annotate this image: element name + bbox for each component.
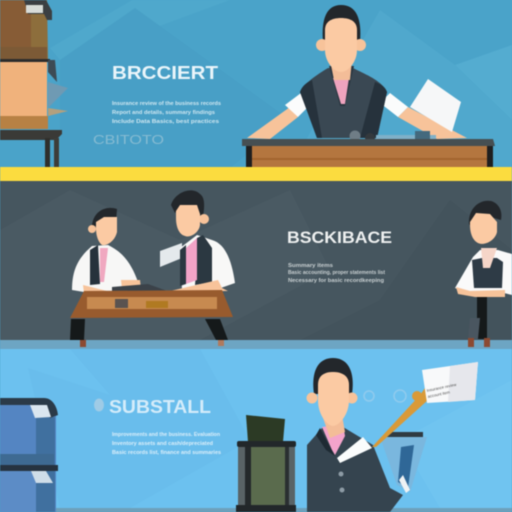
text block: middle	[288, 263, 385, 284]
text block: bottom	[112, 432, 221, 456]
text block: bottom: Improvements and the business. Evaluation	[112, 432, 221, 438]
figure: man with paper	[306, 358, 410, 512]
illustration: white collar sleeve	[337, 437, 372, 463]
heading: bottom: SUBSTALL	[109, 397, 211, 417]
illustration: stacked boxes on stool	[0, 0, 68, 167]
panel: bottom light blue background	[0, 349, 512, 508]
figure: standing man right	[455, 201, 512, 347]
text block: top	[112, 101, 221, 125]
text block: middle: Necessary for basic recordkeeping	[288, 278, 384, 284]
illustration: desk	[242, 139, 495, 167]
icon: faded dot	[94, 398, 104, 412]
text block: top: Report and details, summary findings	[112, 110, 215, 116]
illustration: paper sheet: Insurance review	[426, 382, 457, 393]
text block: top: Insurance review of the business records	[112, 101, 221, 107]
panel: bottom strip	[0, 508, 512, 512]
heading: middle: BSCKIBACE	[287, 228, 392, 247]
panel: blue floor strip	[0, 340, 512, 349]
illustration: paper sheet	[412, 362, 478, 403]
illustration: blue boxes	[0, 398, 58, 512]
illustration: folder behind man	[380, 432, 427, 492]
text block: bottom: Inventory assets and cash/depreciated	[112, 441, 213, 447]
icon: arm pointing with stick	[372, 388, 428, 447]
illustration: paper sheet: account item	[427, 389, 451, 399]
text block: bottom: Basic records list, finance and summaries	[112, 450, 221, 456]
figure: standing man at table	[160, 190, 235, 292]
figure: man at desk	[247, 5, 467, 139]
text block: middle: Basic accounting, proper statements list	[288, 270, 385, 276]
text block: top: Include Data Basics, best practices	[112, 119, 219, 125]
panel: top blue background	[0, 0, 512, 168]
illustration: waste bin with papers	[236, 415, 296, 512]
icon: faded swirls	[364, 390, 406, 402]
heading: top: BRCCIERT	[112, 63, 218, 83]
text block: middle: Summary items	[288, 263, 333, 269]
figure: seated man left	[72, 208, 141, 293]
caption: faded top: CBITOTO	[93, 132, 164, 147]
illustration: wooden table	[70, 284, 233, 347]
panel: yellow divider band	[0, 167, 512, 181]
panel: middle dark background	[0, 181, 512, 340]
icon: desk items	[350, 130, 436, 143]
